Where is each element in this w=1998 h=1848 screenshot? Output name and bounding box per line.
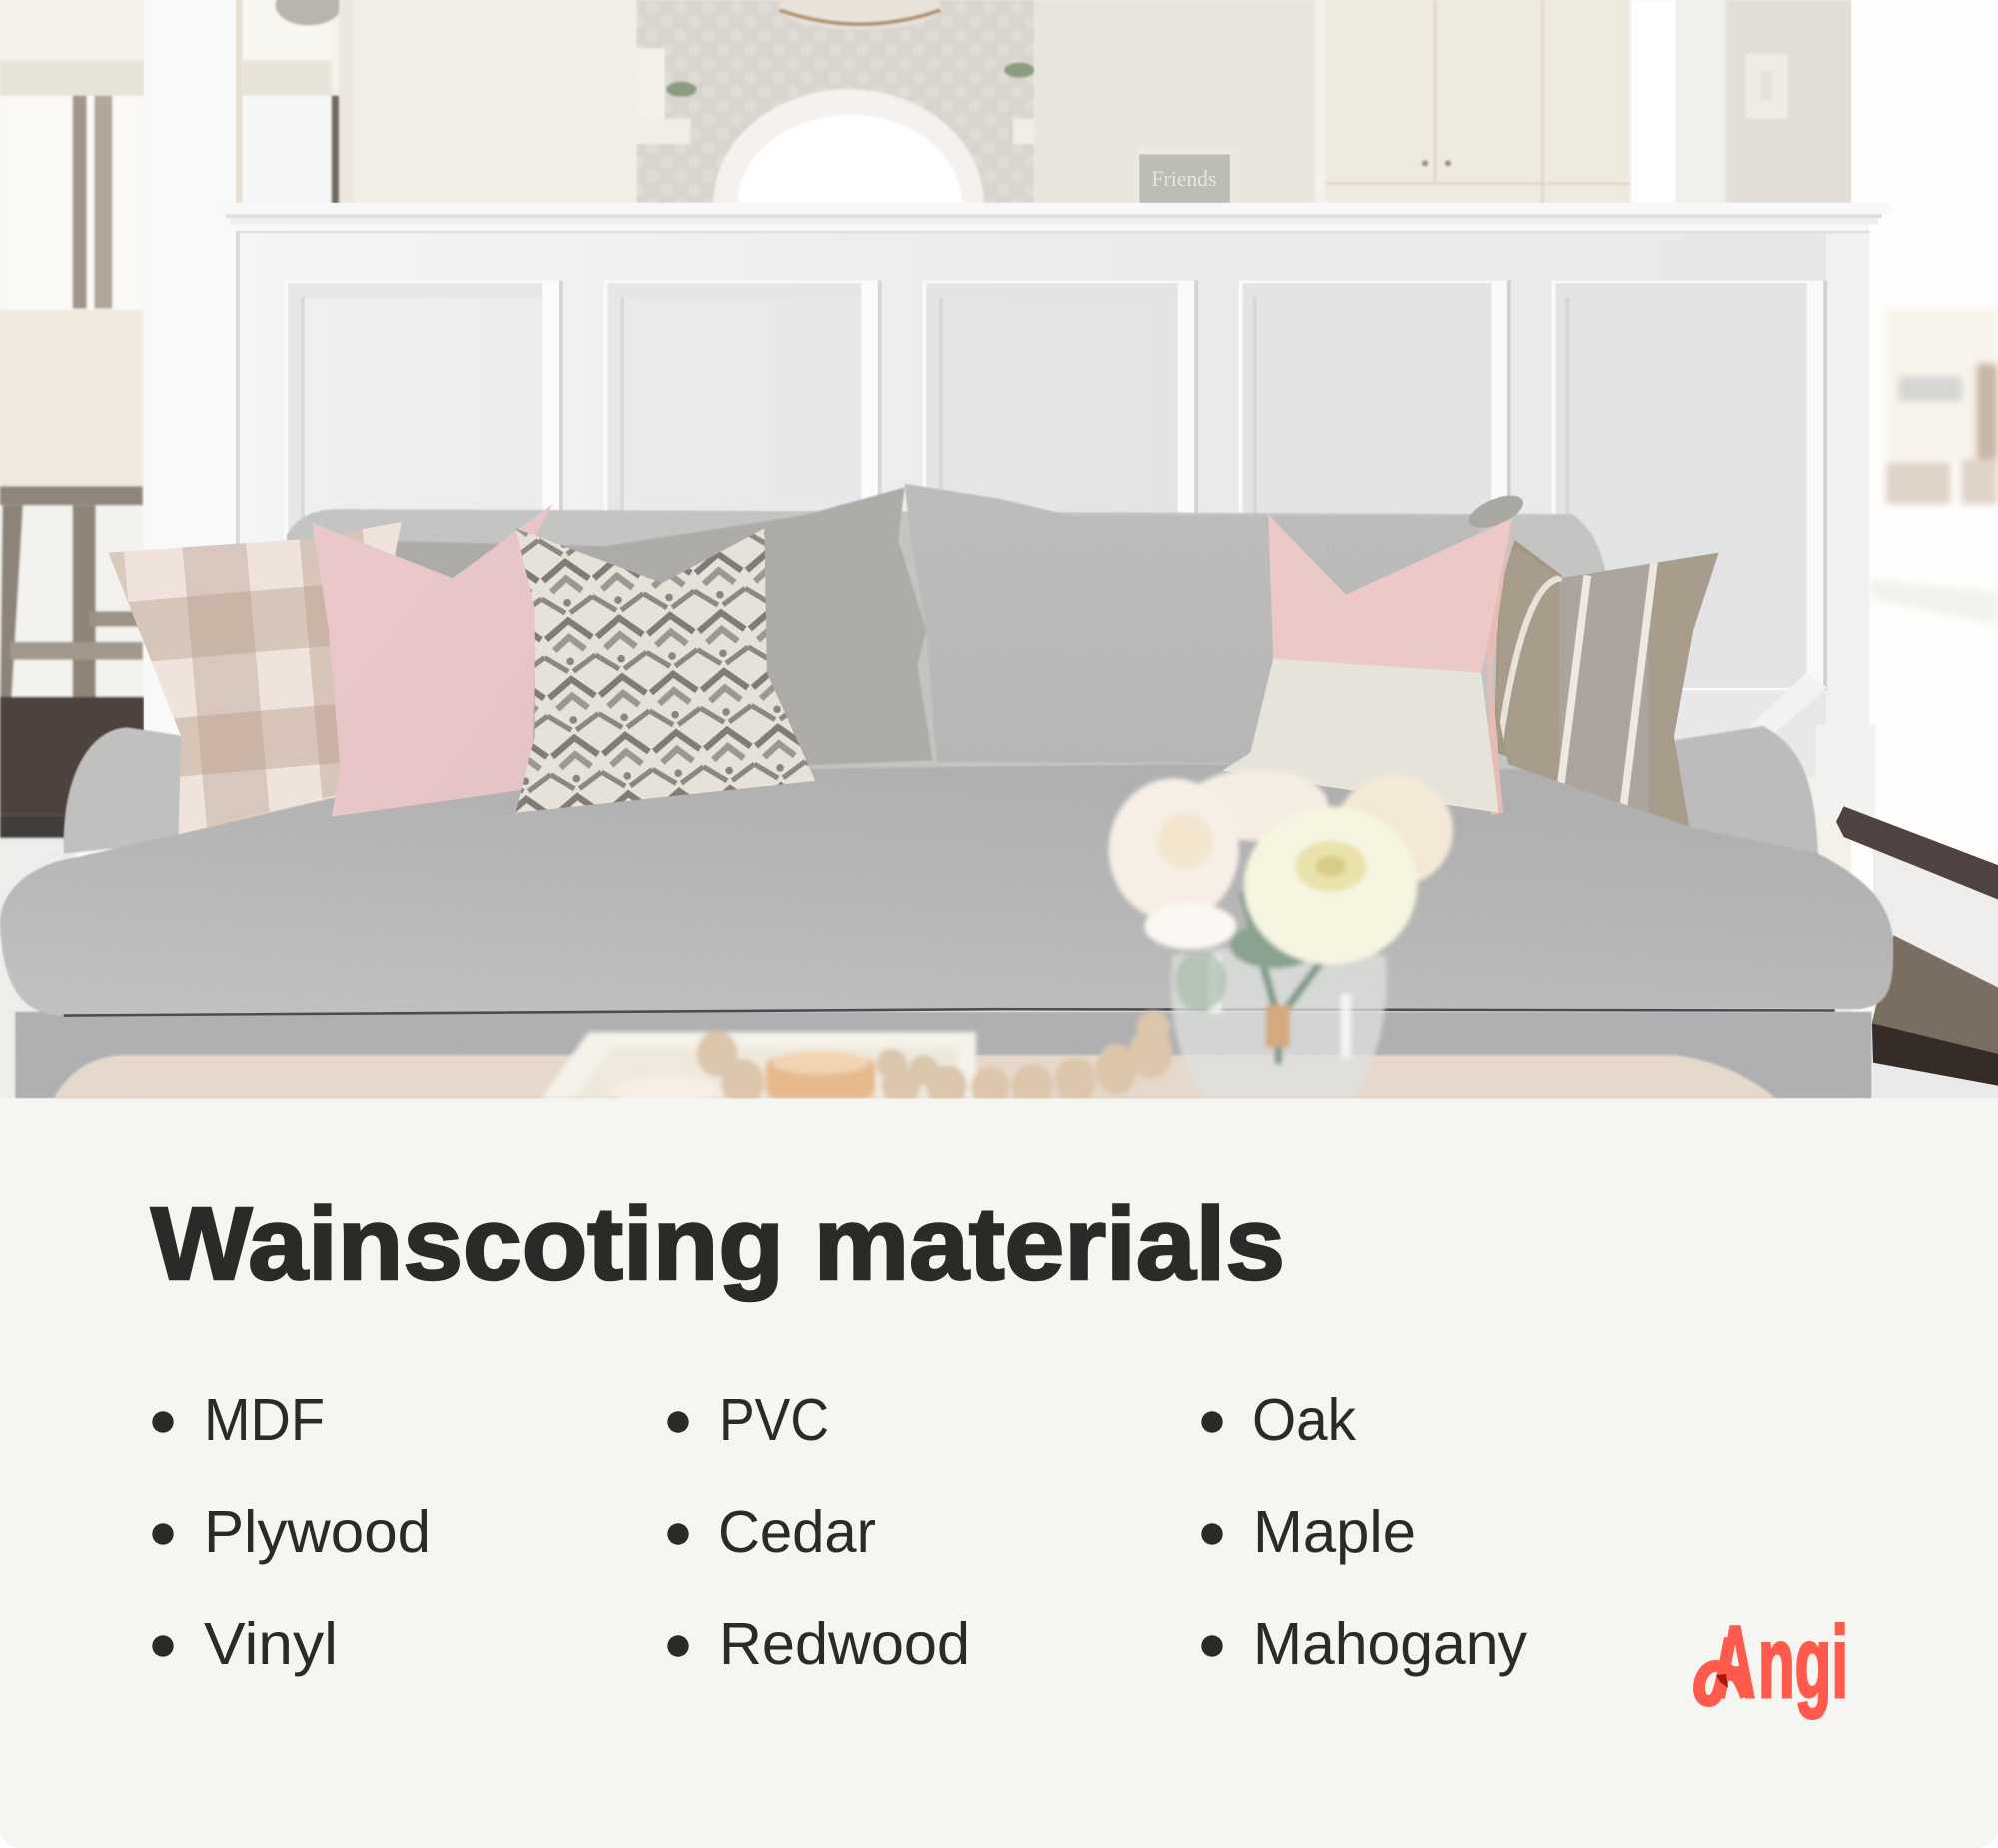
- left back cushion: [395, 488, 933, 767]
- plaid pillow: [63, 492, 450, 879]
- wall art sign: [1139, 154, 1230, 203]
- list column 2: [667, 1387, 970, 1677]
- item: Redwood: Redwood: [719, 1611, 970, 1677]
- photo: living room with wainscoting: [0, 0, 1998, 1107]
- logo: Angi: A: [1715, 1607, 1755, 1719]
- logo: Angi: [1699, 1607, 1848, 1719]
- item: Oak: [1201, 1387, 1356, 1453]
- vase: [1171, 946, 1386, 1098]
- blooms: [1336, 775, 1453, 887]
- title: Wainscoting materials: [151, 1186, 1285, 1301]
- small grey pillow: [1464, 489, 1527, 535]
- flowers in glass vase: [1109, 769, 1453, 1098]
- item: Mahogany: Mahogany: [1253, 1611, 1527, 1677]
- item: MDF: [152, 1387, 325, 1453]
- tan pillow behind striped pillow: [1494, 540, 1562, 764]
- right back cushion: [905, 484, 1479, 764]
- shadow line under seat cushion: [64, 1009, 1835, 1016]
- list column 3: [1201, 1387, 1527, 1677]
- item: Plywood: Plywood: [204, 1499, 431, 1565]
- tray with candles and beads: [541, 1010, 1172, 1107]
- wainscot panel 5: [1552, 281, 1827, 736]
- left arm: [64, 727, 185, 854]
- text panel: [0, 1099, 1998, 1848]
- wainscot panel 1: [288, 280, 563, 531]
- item: Maple: Maple: [1253, 1499, 1416, 1565]
- right arm: [1675, 726, 1818, 861]
- item: PVC: [667, 1387, 829, 1453]
- sofa: [0, 484, 1893, 1098]
- wall art sign: Friends: [1151, 167, 1216, 191]
- item: MDF: MDF: [204, 1387, 325, 1453]
- column: [144, 0, 242, 764]
- background: tiled alcove with arched window: [637, 0, 1035, 204]
- sofa back: [287, 509, 1608, 777]
- item: Vinyl: [152, 1611, 338, 1677]
- stems: [1243, 892, 1326, 1064]
- background: bright window at far right: [1851, 0, 1998, 1098]
- wainscot panel 3: [923, 280, 1198, 513]
- striped pillow: [1491, 541, 1726, 834]
- item: Oak: Oak: [1252, 1387, 1356, 1453]
- wainscot panel 2: [603, 280, 881, 511]
- background: wall, cabinets and light switch at right: [1035, 0, 1851, 204]
- geometric pattern pillow: [509, 522, 822, 818]
- pink and linen pillow: [1222, 514, 1512, 815]
- wainscoting half wall: [219, 203, 1891, 817]
- background: kitchen and stool at left: [0, 0, 354, 857]
- item: Vinyl: Vinyl: [204, 1611, 338, 1677]
- wainscot panel 4: [1239, 280, 1511, 513]
- sofa base: [15, 1012, 1872, 1098]
- item: Cedar: Cedar: [718, 1499, 876, 1565]
- pink pillow: [312, 504, 553, 817]
- list column 1: [152, 1387, 431, 1677]
- stairs at right: [1836, 806, 1998, 1098]
- logo: Angi: ngi: [1758, 1607, 1848, 1719]
- item: PVC: PVC: [719, 1387, 829, 1453]
- seat cushion: [0, 764, 1893, 1016]
- cap moulding: [219, 203, 1891, 233]
- coffee table: [54, 1055, 1776, 1098]
